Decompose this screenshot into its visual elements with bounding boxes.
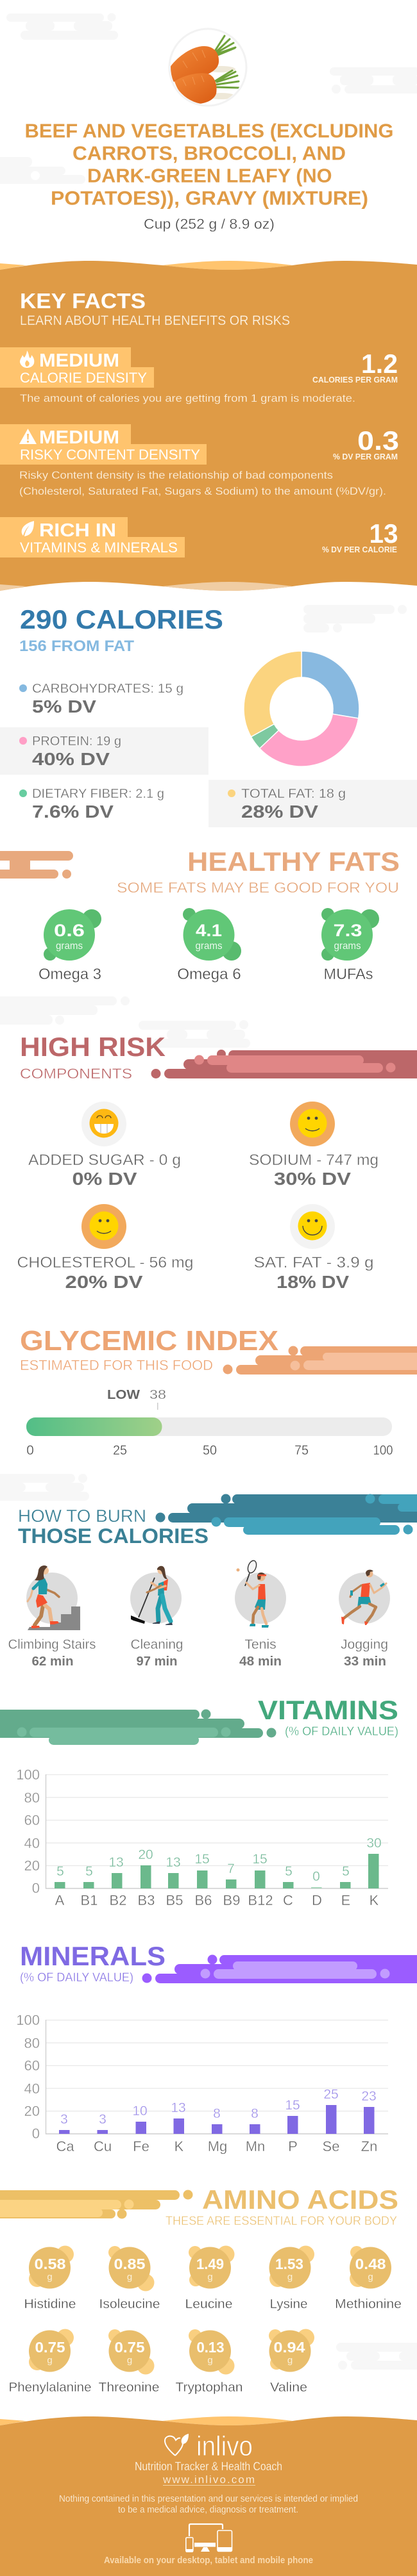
label: climbing stairs: Climbing Stairs xyxy=(8,1637,96,1652)
amino: lysine xyxy=(269,2245,314,2311)
bar chart: minerals: 8 xyxy=(213,2106,221,2121)
gauge scale: 50 xyxy=(203,1443,217,1458)
bar chart: vitamins: 20 xyxy=(24,1858,40,1874)
bar chart: minerals: 25 xyxy=(323,2087,339,2102)
bar chart: vitamins: 5 xyxy=(85,1864,93,1879)
fat: omega 6: Omega 6 xyxy=(177,966,241,983)
bar chart: vitamins: B9 xyxy=(223,1892,240,1908)
bar chart: vitamins: 80 xyxy=(24,1790,40,1806)
amino: histidine: g xyxy=(47,2272,53,2283)
bar chart: vitamins: 13 xyxy=(166,1855,181,1870)
amino: histidine: Histidine xyxy=(24,2297,76,2311)
decorative swoosh xyxy=(0,2190,192,2218)
risk: sodium: SODIUM - 747 mg xyxy=(249,1152,379,1169)
subheading: LEARN ABOUT HEALTH BENEFITS OR RISKS xyxy=(20,313,290,328)
logo text: inlivo xyxy=(196,2431,253,2462)
subheading: from fat: 156 FROM FAT xyxy=(19,638,134,655)
panel: healthy fats xyxy=(0,846,400,983)
amino: methionine: Methionine xyxy=(335,2297,402,2311)
disclaimer: Nothing contained in this presentation and our services is intended or implied xyxy=(59,2494,358,2504)
heading: key facts: KEY FACTS xyxy=(20,290,146,313)
bar chart: vitamins: B5 xyxy=(166,1892,183,1908)
bar chart: minerals: 13 xyxy=(171,2101,186,2115)
heading: minerals: MINERALS xyxy=(20,1941,166,1971)
bar chart: minerals: Mn xyxy=(246,2138,265,2154)
calorie density block: The amount of calories you are getting from 1 gram is moderate. xyxy=(20,393,355,404)
wave: end of key facts xyxy=(0,582,417,593)
amino: threonine xyxy=(99,2329,159,2395)
icon: leaf xyxy=(22,521,34,536)
bar chart: vitamins: C xyxy=(283,1892,293,1908)
risky content density block: Risky Content density is the relationship of bad components xyxy=(19,470,333,481)
amino: phenylalanine xyxy=(9,2329,91,2395)
bar chart: vitamins: 0 xyxy=(312,1869,320,1884)
bar chart: minerals: Ca xyxy=(56,2138,74,2154)
gauge value xyxy=(107,1388,166,1410)
label: climbing stairs: 62 min xyxy=(32,1655,73,1669)
heading: vitamins: VITAMINS xyxy=(258,1695,398,1725)
amino: leucine: Leucine xyxy=(185,2297,232,2311)
bar chart: vitamins: 60 xyxy=(24,1812,40,1828)
tagline: Nutrition Tracker & Health Coach xyxy=(135,2459,282,2473)
gauge bar xyxy=(26,1417,392,1436)
vitamins and minerals block: RICH IN xyxy=(39,520,116,541)
risk: added sugar xyxy=(28,1102,181,1189)
panel: amino acids xyxy=(0,2184,402,2395)
amino: tryptophan: g xyxy=(207,2355,213,2366)
amino: methionine: g xyxy=(368,2272,373,2283)
panel: calories xyxy=(0,604,417,827)
legend: protein: PROTEIN: 19 g xyxy=(32,734,121,748)
bar chart: vitamins: B12 xyxy=(248,1892,273,1908)
legend: total fat: TOTAL FAT: 18 g xyxy=(241,787,346,801)
amino: valine xyxy=(269,2329,314,2395)
bar chart: vitamins: E xyxy=(341,1892,350,1908)
bar chart: vitamins: 5 xyxy=(285,1864,293,1879)
bar chart: vitamins: B6 xyxy=(195,1892,212,1908)
risky content density block: 0.3 xyxy=(357,425,399,456)
gauge scale xyxy=(26,1443,393,1458)
gauge scale: 75 xyxy=(294,1443,309,1458)
title: CARROTS, BROCCOLI, AND xyxy=(72,142,346,164)
risk: cholesterol: 20% DV xyxy=(65,1272,143,1292)
title: BEEF AND VEGETABLES (EXCLUDING xyxy=(24,119,394,142)
legend: carbohydrates: 5% DV xyxy=(32,697,96,716)
risk: cholesterol: CHOLESTEROL - 56 mg xyxy=(17,1254,194,1271)
legend: protein: 40% DV xyxy=(32,749,110,769)
icon: flame xyxy=(20,351,34,368)
icon: warning triangle xyxy=(19,429,37,444)
gauge value: 38 xyxy=(149,1388,166,1402)
bar chart: vitamins: 15 xyxy=(194,1852,210,1867)
decorative swoosh xyxy=(223,1346,417,1375)
bar chart: minerals: P xyxy=(288,2138,298,2154)
amino: lysine: g xyxy=(287,2272,293,2283)
bar chart: minerals: Fe xyxy=(133,2138,149,2154)
gauge scale: 100 xyxy=(373,1443,393,1458)
risky content density block: (Cholesterol, Saturated Fat, Sugars & Sodium) to the amount (%DV/gr). xyxy=(19,486,386,497)
panel: footer xyxy=(0,2416,417,2576)
amino: isoleucine xyxy=(99,2246,160,2311)
fat: MUFAs: grams xyxy=(334,941,361,952)
bar chart: minerals: 8 xyxy=(251,2106,259,2121)
label: jogging: Jogging xyxy=(341,1637,388,1652)
bar chart: vitamins: B2 xyxy=(110,1892,126,1908)
amino: leucine: g xyxy=(207,2272,213,2283)
fat: MUFAs xyxy=(321,908,379,983)
bar chart: minerals: 80 xyxy=(24,2035,40,2051)
calorie density block: CALORIE DENSITY xyxy=(20,370,147,386)
bar chart: vitamins: 40 xyxy=(24,1835,40,1851)
bar chart: vitamins: 0 xyxy=(32,1880,40,1896)
bar chart: vitamins: 100 xyxy=(16,1767,40,1783)
panel: glycemic index xyxy=(20,1325,417,1458)
calorie density block xyxy=(0,347,398,404)
amino: histidine xyxy=(24,2245,76,2311)
panel: vitamins xyxy=(0,1695,398,1908)
bar chart: minerals: 15 xyxy=(285,2098,300,2113)
fat: omega 3: 0.6 xyxy=(54,921,85,940)
risky content density block: % DV PER GRAM xyxy=(333,452,398,461)
subheading: (% OF DAILY VALUE) xyxy=(285,1725,398,1738)
label: tennis: 48 min xyxy=(239,1655,282,1669)
risk: sodium xyxy=(249,1102,379,1189)
subheading: SOME FATS MAY BE GOOD FOR YOU xyxy=(117,879,399,896)
risky content density block xyxy=(0,424,399,497)
bar chart: minerals: 0 xyxy=(32,2126,40,2142)
risk: added sugar: 0% DV xyxy=(72,1169,137,1189)
bar chart: vitamins: D xyxy=(312,1892,322,1908)
fat: omega 3: Omega 3 xyxy=(38,966,101,983)
serving size: Cup (252 g / 8.9 oz) xyxy=(144,216,275,232)
heading: 290 calories: 290 CALORIES xyxy=(20,604,223,634)
risk: saturated fat: 18% DV xyxy=(277,1272,349,1292)
calorie density block: MEDIUM xyxy=(39,351,119,371)
bar chart: minerals: Mg xyxy=(208,2138,227,2154)
amino: threonine: g xyxy=(127,2355,132,2366)
gauge value: LOW xyxy=(107,1388,140,1402)
bar chart: minerals: Cu xyxy=(94,2138,112,2154)
amino: valine: 0.94 xyxy=(273,2339,305,2356)
risk: sodium: 30% DV xyxy=(274,1169,351,1189)
label: tennis xyxy=(239,1637,282,1669)
risky content density block: RISKY CONTENT DENSITY xyxy=(20,447,200,463)
amino: histidine: 0.58 xyxy=(35,2256,66,2272)
title: DARK-GREEN LEAFY (NO xyxy=(87,164,332,187)
heading: how to burn: HOW TO BURN xyxy=(18,1506,146,1526)
vitamins and minerals block xyxy=(0,517,398,557)
activity: climbing stairs xyxy=(26,1565,80,1630)
fat: MUFAs: MUFAs xyxy=(323,966,373,983)
amino: phenylalanine: g xyxy=(47,2355,53,2366)
activity: jogging xyxy=(339,1570,390,1625)
label: cleaning xyxy=(131,1637,183,1669)
fat: MUFAs: 7.3 xyxy=(334,921,362,940)
legend: dietary fiber: 7.6% DV xyxy=(32,802,114,822)
risky content density block: MEDIUM xyxy=(39,427,119,448)
bar chart: minerals: 60 xyxy=(24,2058,40,2074)
amino: isoleucine: 0.85 xyxy=(114,2256,146,2272)
label: jogging: 33 min xyxy=(344,1655,386,1669)
amino: tryptophan: Tryptophan xyxy=(176,2381,243,2395)
amino: methionine xyxy=(335,2246,402,2311)
amino: valine: g xyxy=(287,2355,293,2366)
icon: devices xyxy=(186,2524,232,2552)
bar chart: minerals xyxy=(16,2012,388,2154)
gauge scale: 25 xyxy=(113,1443,127,1458)
fat: omega 6: 4.1 xyxy=(196,921,222,940)
bar chart: minerals: 40 xyxy=(24,2081,40,2097)
amino: phenylalanine: Phenylalanine xyxy=(9,2381,91,2395)
subheading: ESTIMATED FOR THIS FOOD xyxy=(20,1357,213,1373)
title: POTATOES)), GRAVY (MIXTURE) xyxy=(51,187,368,209)
bar chart: vitamins: 15 xyxy=(252,1852,268,1867)
decorative swoosh xyxy=(142,1954,417,1983)
bar chart: minerals: 100 xyxy=(16,2012,40,2028)
fat: omega 6: grams xyxy=(195,941,222,952)
decorative swoosh xyxy=(155,1494,417,1535)
label: tennis: Tenis xyxy=(244,1637,277,1652)
amino: valine: Valine xyxy=(270,2381,307,2395)
heading: amino acids: AMINO ACIDS xyxy=(202,2184,398,2215)
amino: phenylalanine: 0.75 xyxy=(35,2339,65,2356)
amino: isoleucine: Isoleucine xyxy=(99,2297,160,2311)
legend: dietary fiber: DIETARY FIBER: 2.1 g xyxy=(32,787,164,801)
bar chart: vitamins: K xyxy=(370,1892,379,1908)
amino: lysine: Lysine xyxy=(269,2297,308,2311)
vitamins and minerals block: % DV PER CALORIE xyxy=(322,545,397,554)
icon: carrots in circle xyxy=(169,29,246,106)
heading: those calories: THOSE CALORIES xyxy=(18,1524,208,1548)
subheading: THESE ARE ESSENTIAL FOR YOUR BODY xyxy=(166,2215,397,2228)
legend: carbohydrates xyxy=(19,682,183,716)
bar chart: minerals: 20 xyxy=(24,2103,40,2119)
icon: inlivo heart logo xyxy=(165,2434,189,2456)
amino: leucine: 1.49 xyxy=(196,2256,224,2272)
label: jogging xyxy=(341,1637,388,1669)
legend: total fat: 28% DV xyxy=(241,802,318,822)
decorative swoosh xyxy=(0,851,73,879)
bar chart: minerals: K xyxy=(174,2138,184,2154)
bar chart: minerals: 10 xyxy=(132,2104,148,2118)
bar chart: vitamins: 13 xyxy=(108,1855,124,1870)
legend: protein xyxy=(19,734,121,769)
vitamins and minerals block: 13 xyxy=(370,518,398,549)
amino: isoleucine: g xyxy=(127,2272,132,2283)
bar chart: vitamins: B1 xyxy=(81,1892,98,1908)
availability note: Available on your desktop, tablet and mobile phone xyxy=(104,2555,313,2566)
risk: added sugar: ADDED SUGAR - 0 g xyxy=(28,1152,181,1169)
vitamins and minerals block: VITAMINS & MINERALS xyxy=(20,540,178,556)
fat: omega 3: grams xyxy=(56,941,83,952)
bar chart: vitamins: 5 xyxy=(56,1864,64,1879)
bar chart: vitamins: B3 xyxy=(138,1892,155,1908)
bar chart: vitamins: 5 xyxy=(342,1864,350,1879)
heading: high risk: HIGH RISK xyxy=(20,1032,166,1062)
subheading: (% OF DAILY VALUE) xyxy=(20,1971,133,1985)
title xyxy=(24,119,394,209)
legend: dietary fiber xyxy=(19,787,164,822)
panel: key facts xyxy=(0,261,417,593)
decorative swoosh xyxy=(151,1050,417,1078)
activity: cleaning xyxy=(130,1566,182,1625)
panel: high risk components xyxy=(17,1032,417,1292)
bar chart: vitamins: 20 xyxy=(138,1847,153,1862)
disclaimer: to be a medical advice, diagnosis or treatment. xyxy=(118,2505,298,2515)
bar chart: minerals: 3 xyxy=(60,2112,68,2127)
decorative swoosh xyxy=(0,1710,276,1745)
subheading: components: COMPONENTS xyxy=(20,1066,132,1082)
bar chart: minerals: Zn xyxy=(361,2138,377,2154)
panel: minerals xyxy=(16,1941,417,2154)
legend: total fat xyxy=(228,787,346,822)
label: cleaning: 97 min xyxy=(136,1655,177,1669)
amino: methionine: 0.48 xyxy=(355,2256,386,2272)
fat: omega 3 xyxy=(38,909,101,983)
heading: glycemic index: GLYCEMIC INDEX xyxy=(20,1325,278,1357)
risk: saturated fat: SAT. FAT - 3.9 g xyxy=(254,1254,373,1271)
bar chart: minerals: 3 xyxy=(99,2112,106,2127)
bar chart: vitamins: 30 xyxy=(366,1836,382,1851)
amino: tryptophan: 0.13 xyxy=(196,2339,225,2356)
gauge scale: 0 xyxy=(26,1443,34,1458)
amino: threonine: Threonine xyxy=(99,2381,159,2395)
amino: lysine: 1.53 xyxy=(275,2256,303,2272)
calorie density block: 1.2 xyxy=(361,349,398,379)
donut chart xyxy=(244,651,359,766)
amino: leucine xyxy=(185,2245,235,2311)
calorie density block: CALORIES PER GRAM xyxy=(312,375,398,384)
disclaimer xyxy=(59,2494,358,2515)
bar chart: vitamins xyxy=(16,1767,388,1908)
legend: carbohydrates: CARBOHYDRATES: 15 g xyxy=(32,682,183,696)
label: climbing stairs xyxy=(8,1637,96,1669)
risk: saturated fat xyxy=(254,1204,373,1292)
panel: how to burn xyxy=(8,1494,417,1669)
amino: threonine: 0.75 xyxy=(114,2339,145,2356)
website link: www.inlivo.com xyxy=(162,2473,255,2486)
amino: tryptophan xyxy=(176,2329,243,2395)
label: cleaning: Cleaning xyxy=(131,1637,183,1652)
activity: tennis xyxy=(235,1560,286,1628)
heading: healthy fats: HEALTHY FATS xyxy=(187,846,400,877)
risk: cholesterol xyxy=(17,1204,194,1292)
bar chart: minerals: 23 xyxy=(361,2089,377,2104)
bar chart: vitamins: A xyxy=(55,1892,65,1908)
bar chart: minerals: Se xyxy=(323,2138,339,2154)
bar chart: vitamins: 7 xyxy=(227,1862,235,1876)
fat: omega 6 xyxy=(177,908,241,983)
